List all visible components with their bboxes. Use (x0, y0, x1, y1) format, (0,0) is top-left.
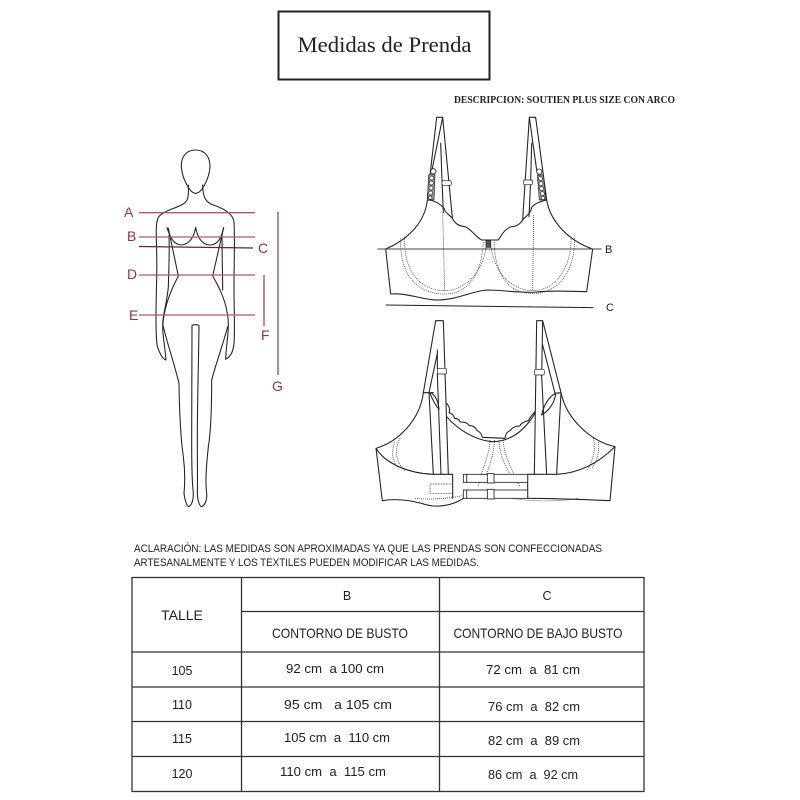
line B (377, 247, 602, 250)
strap sliders (437, 368, 544, 375)
row 115: 105 cm a 110 cm (284, 731, 390, 745)
row 120: 120 (172, 767, 192, 781)
straps (427, 117, 547, 219)
underwires (401, 213, 575, 294)
row 115: 82 cm a 89 cm (488, 734, 580, 748)
row 105 (172, 662, 580, 678)
title (278, 12, 490, 80)
back straps (423, 321, 561, 474)
table header: CONTORNO DE BAJO BUSTO (454, 625, 623, 641)
label C: C (606, 302, 614, 314)
dotted seams (393, 438, 599, 501)
measurement lines (139, 212, 278, 375)
measurement labels: F (261, 327, 270, 343)
back outline (376, 393, 615, 506)
table header (161, 589, 623, 641)
product description: DESCRIPCION: SOUTIEN PLUS SIZE CON ARCO (454, 95, 675, 106)
row 115 (172, 731, 580, 748)
body silhouette (156, 150, 234, 507)
dashed label patch (430, 484, 453, 493)
bra back view (376, 321, 615, 506)
size table (132, 578, 644, 792)
row 120: 86 cm a 92 cm (488, 768, 578, 782)
inner cup details (430, 393, 556, 415)
table header: B (343, 589, 351, 603)
measurement labels: G (272, 378, 283, 394)
row 110 (172, 698, 580, 714)
line C (386, 305, 593, 308)
measurement labels: E (129, 307, 138, 323)
measurement labels: B (127, 228, 136, 244)
label B: B (605, 244, 612, 256)
disclaimer note (134, 542, 602, 569)
disclaimer note: ACLARACIÓN: LAS MEDIDAS SON APROXIMADAS YA QUE LAS PRENDAS SON CONFECCIONADAS (134, 542, 602, 555)
table header: CONTORNO DE BUSTO (272, 625, 408, 641)
row 110: 95 cm a 105 cm (284, 698, 392, 712)
strap hardware (427, 169, 546, 200)
hook tapes (463, 474, 528, 499)
measurement labels: D (127, 266, 137, 282)
row 105: 72 cm a 81 cm (486, 663, 580, 677)
measurement labels: A (124, 204, 134, 220)
measurement labels (124, 204, 283, 394)
row 120 (172, 765, 578, 782)
title: Medidas de Prenda (298, 32, 472, 57)
body figure with measurement lines (124, 150, 283, 507)
cups and band (386, 200, 593, 300)
row 110: 76 cm a 82 cm (488, 700, 580, 714)
row 105: 92 cm a 100 cm (286, 662, 384, 676)
row 105: 105 (172, 664, 192, 678)
row 110: 110 (172, 698, 192, 712)
disclaimer note: ARTESANALMENTE Y LOS TEXTILES PUEDEN MODIFICAR LAS MEDIDAS. (134, 557, 479, 569)
row 115: 115 (172, 732, 192, 746)
table header: C (542, 589, 552, 603)
bra front view (377, 117, 602, 308)
measurement labels: C (258, 240, 268, 256)
table grid (132, 578, 644, 792)
neckline and lace (447, 403, 535, 442)
row 120: 110 cm a 115 cm (280, 765, 386, 779)
table header: TALLE (161, 607, 203, 623)
